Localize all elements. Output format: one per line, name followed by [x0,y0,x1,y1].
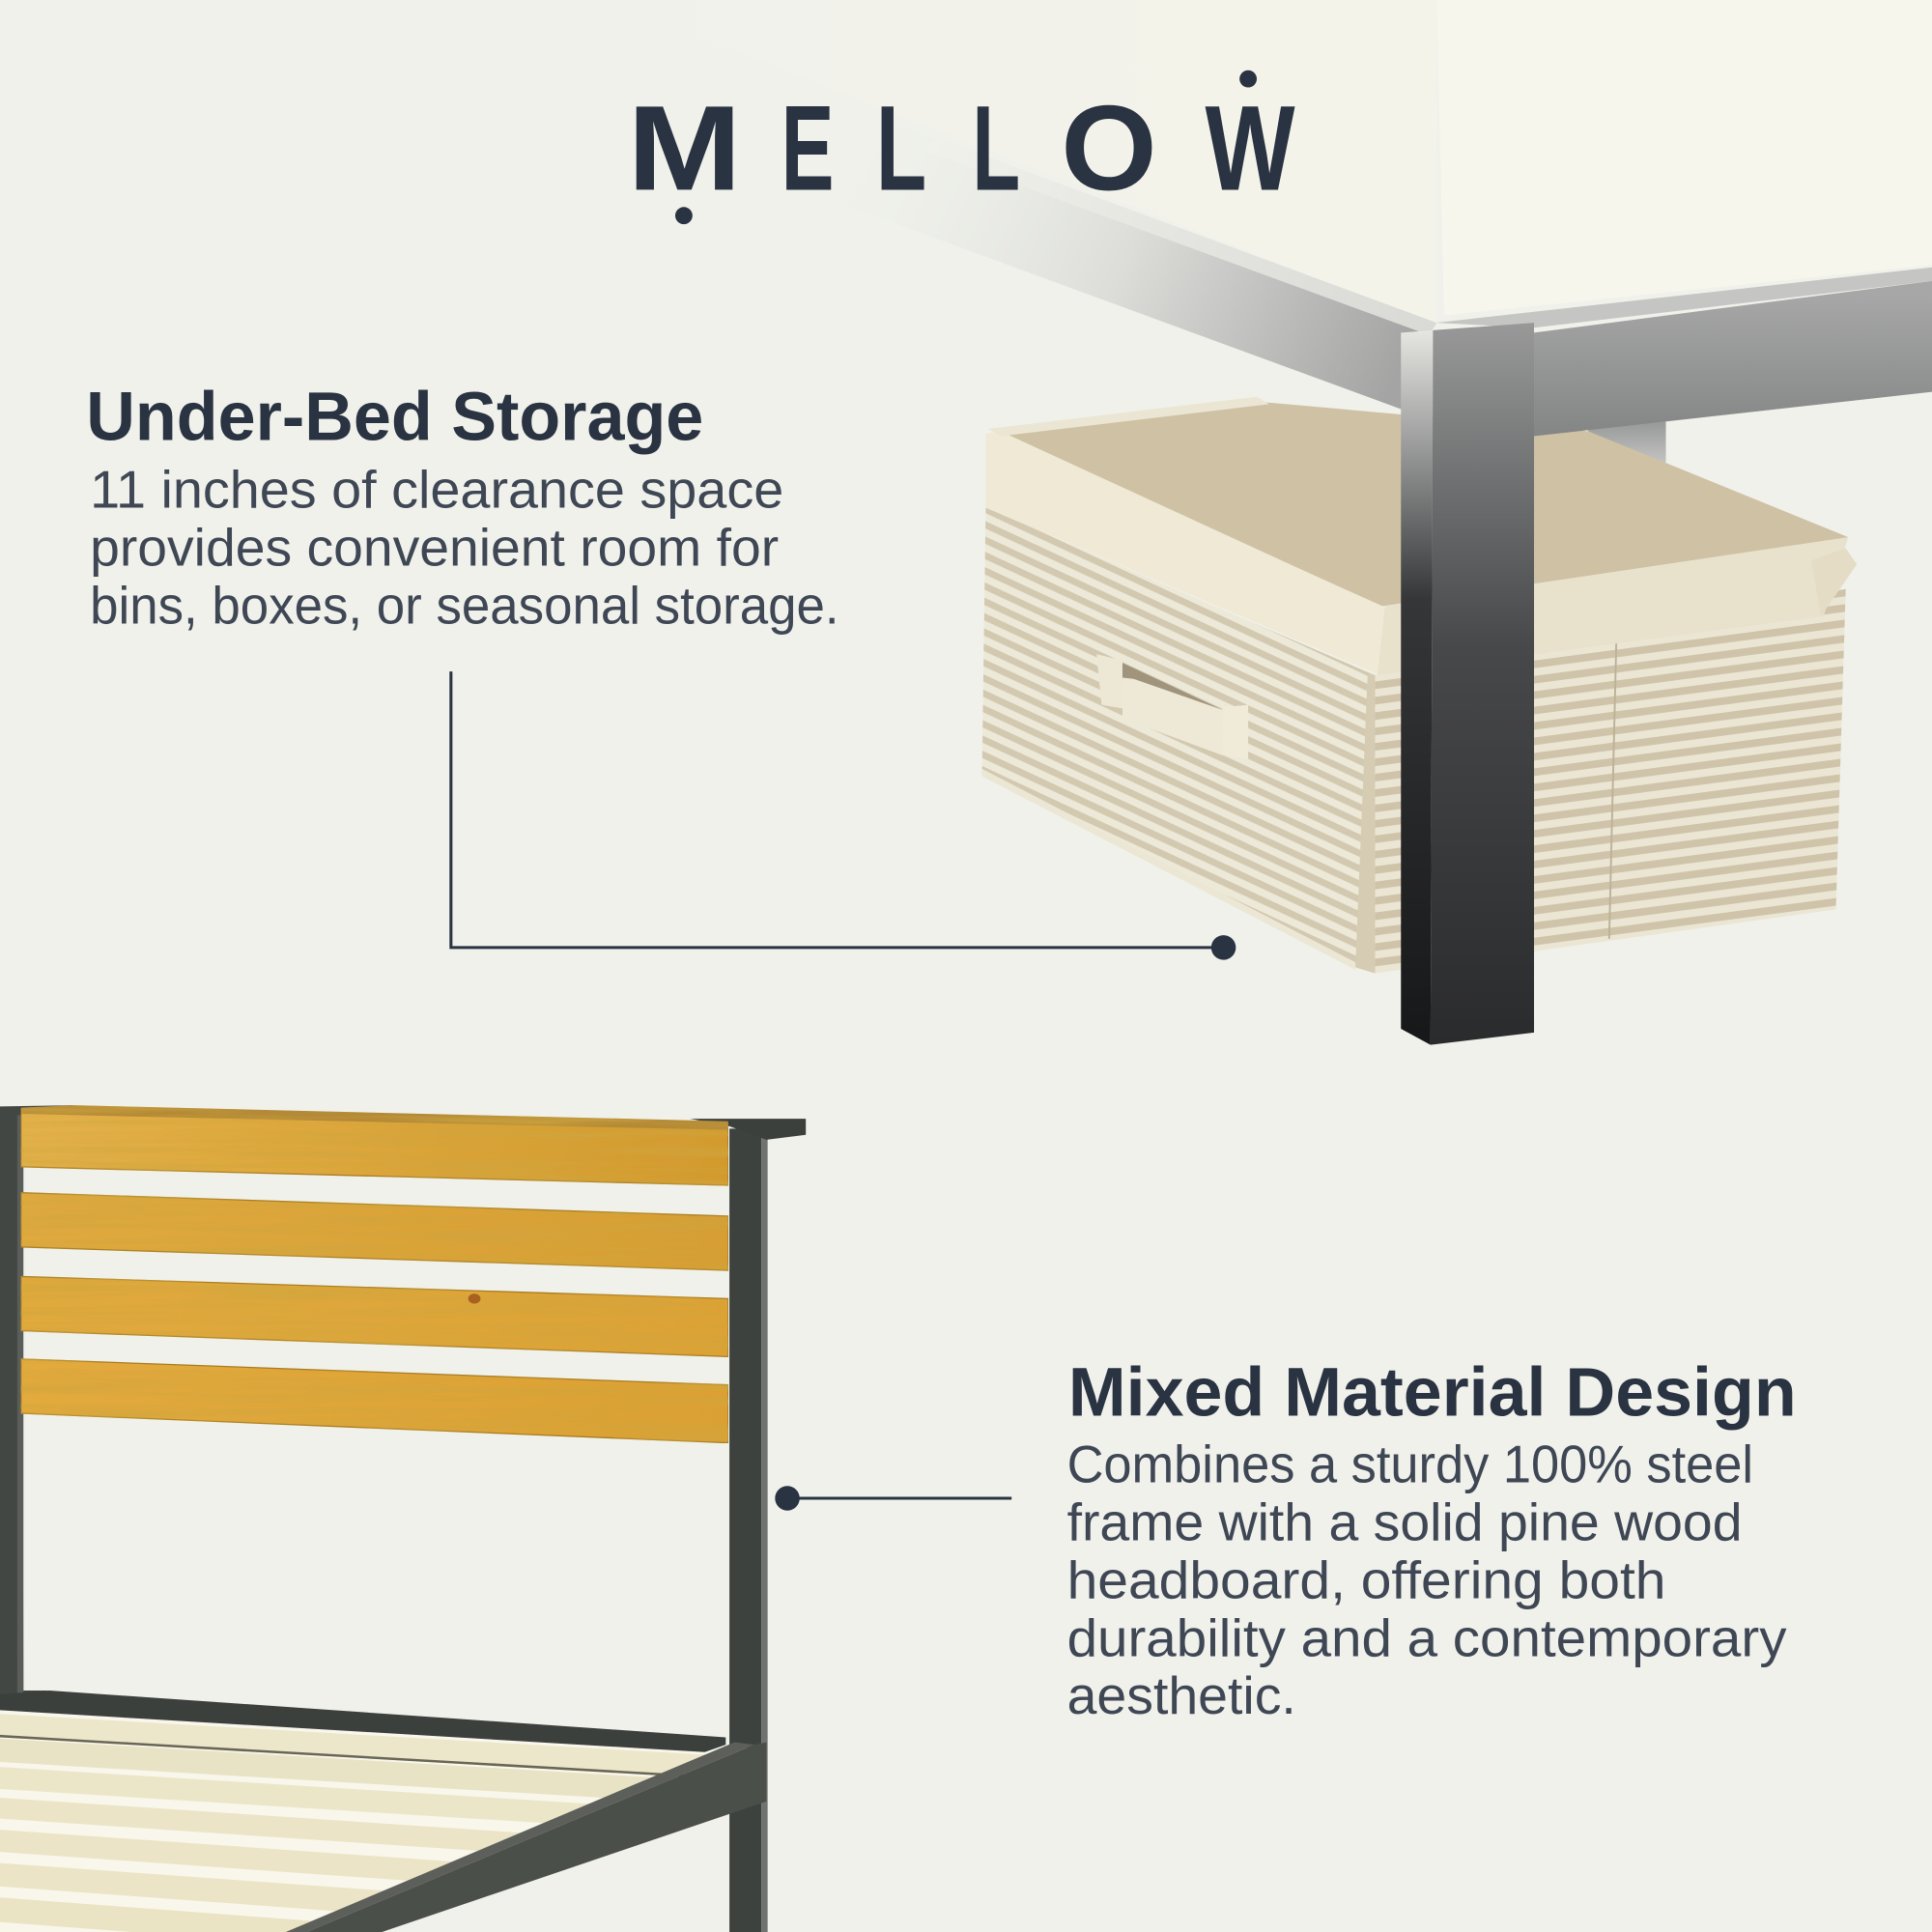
logo: E [781,81,835,215]
logo: M [627,81,742,215]
heading: Mixed Material Design [1068,1354,1797,1432]
wood knot [469,1293,480,1303]
logo: W [1205,81,1295,215]
bed leg [1401,323,1534,1045]
photo: bed corner with storage box [604,0,1932,1045]
bed slats [0,1700,788,1932]
back leg [1588,421,1665,469]
wood plank 4 [21,1359,728,1443]
body text: headboard, offering both [1067,1549,1665,1609]
body text: provides convenient room for [90,517,779,577]
left post [0,1105,74,1695]
box lid right band [1378,537,1848,675]
wood plank 1 [21,1105,728,1185]
logo: O [1061,81,1157,215]
body text [90,460,839,635]
wood plank 2 [21,1193,728,1270]
left side rail [739,64,1436,409]
box corner tab [1811,549,1857,616]
body text: durability and a contemporary [1067,1607,1787,1667]
body text: bins, boxes, or seasonal storage. [90,575,839,635]
wood plank 3 [21,1276,728,1356]
body text: frame with a solid pine wood [1067,1492,1743,1551]
heading: Under-Bed Storage [86,378,703,455]
body text: aesthetic. [1067,1665,1296,1725]
logo: L [876,81,926,215]
body text: 11 inches of clearance space [90,460,783,520]
mattress [604,0,1932,323]
callout line: mixed material [775,1486,1011,1511]
box handle [1096,654,1248,759]
text block: mixed material design [1067,1354,1797,1725]
right side rail [1435,268,1932,437]
box lid left band [985,431,1403,675]
box lid top [1001,402,1848,607]
side rail [286,1743,766,1932]
storage box [982,397,1857,974]
text block: under-bed storage [86,378,839,635]
box right striped face [1375,589,1846,974]
body text: Combines a sturdy 100% steel [1067,1434,1753,1493]
logo: L [972,81,1020,215]
right post [690,1119,806,1932]
body text [1067,1434,1787,1725]
wood planks [21,1105,728,1443]
photo: headboard and slats [0,1105,806,1932]
logo [627,71,1295,224]
headboard lower rail [0,1690,725,1752]
callout line: under-bed storage [451,671,1236,960]
box left striped face [982,508,1375,974]
